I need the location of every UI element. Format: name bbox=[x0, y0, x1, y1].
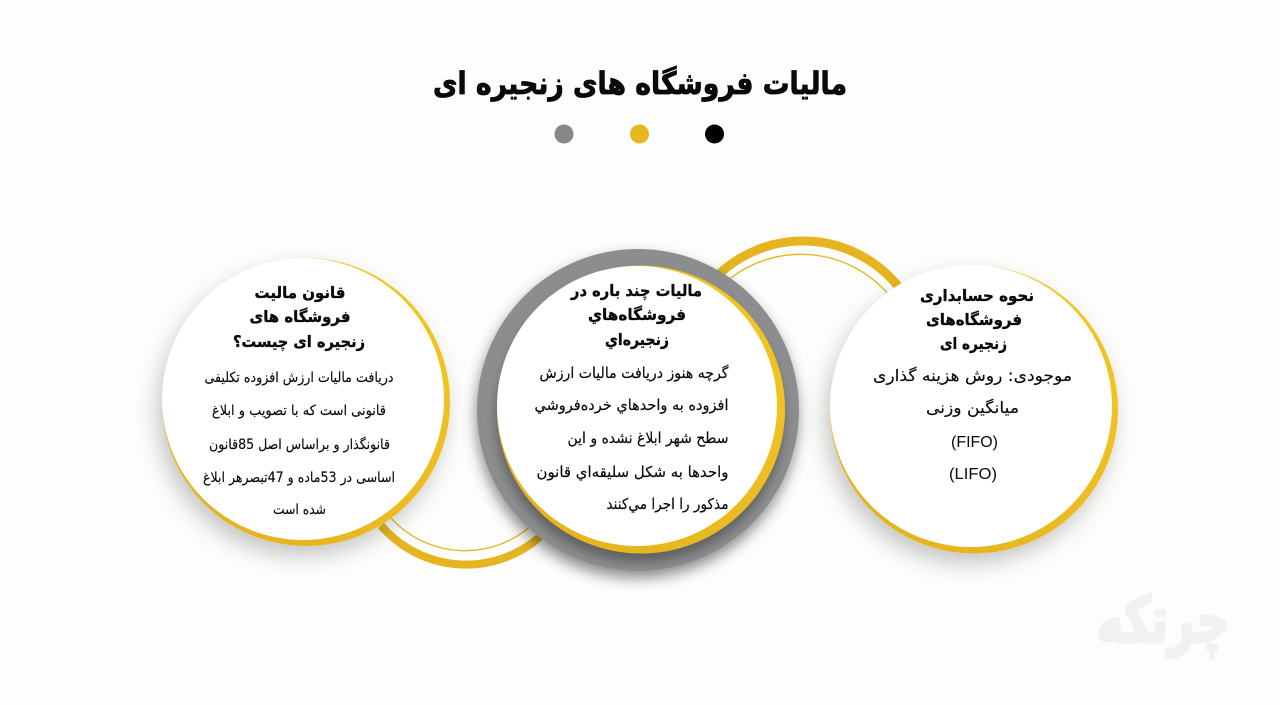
heading: left: زنجیره ای چیست؟ bbox=[233, 332, 365, 352]
text block: center bbox=[534, 364, 729, 514]
heading: right: فروشگاه‌های bbox=[926, 310, 1022, 329]
connector arc: bottom bbox=[381, 518, 545, 565]
heading: right bbox=[920, 286, 1034, 353]
text block: left: شده است bbox=[273, 502, 326, 518]
title: مالیات فروشگاه های زنجیره ای bbox=[433, 65, 847, 102]
panel: multiple tax bbox=[477, 249, 799, 571]
heading: right: نحوه حسابداری bbox=[920, 286, 1034, 305]
circle: right bbox=[830, 265, 1118, 554]
panel: chain store tax law bbox=[162, 258, 450, 546]
heading: center bbox=[570, 281, 702, 350]
text block: center: مذکور را اجرا مي‌کنند bbox=[606, 495, 728, 514]
heading: left: فروشگاه های bbox=[250, 307, 350, 326]
text block: right bbox=[873, 366, 1072, 483]
connector arc: top bbox=[716, 241, 898, 293]
text block: right: (LIFO) bbox=[949, 466, 997, 483]
heading: left: قانون مالیت bbox=[254, 283, 346, 302]
circle: left bbox=[162, 258, 450, 546]
watermark logo: چرتکه bbox=[1096, 584, 1230, 658]
text block: left: قانونگذار و براساس اصل 85قانون bbox=[209, 436, 390, 453]
heading: center: مالیات چند باره در bbox=[570, 281, 702, 301]
text block: left: دریافت مالیات ارزش افزوده تکلیفی bbox=[204, 370, 394, 386]
text block: center: سطح شهر ابلاغ نشده و این bbox=[568, 429, 728, 447]
text block: left bbox=[203, 370, 395, 518]
text block: left: اساسی در 53ماده و 47تبصرهر ابلاغ bbox=[203, 470, 395, 486]
heading: center: زنجیره‌اي bbox=[605, 330, 669, 350]
text block: right: موجودی: روش هزینه گذاری bbox=[873, 366, 1072, 386]
text block: center: واحدها به شکل سلیقه‌اي قانون bbox=[536, 463, 728, 482]
legend dots bbox=[554, 124, 724, 144]
text block: center: افزوده به واحدهاي خرده‌فروشي bbox=[534, 396, 728, 415]
text block: right: (FIFO) bbox=[951, 434, 998, 451]
panel: inventory accounting bbox=[830, 265, 1118, 554]
text block: left: قانونی است که با تصویب و ابلاغ bbox=[212, 403, 386, 419]
heading: right: زنجیره ای bbox=[940, 334, 1007, 353]
text block: right: میانگین وزنی bbox=[926, 398, 1019, 418]
heading: center: فروشگاه‌هاي bbox=[588, 305, 686, 325]
heading: left bbox=[233, 283, 365, 352]
circle: center bbox=[477, 249, 799, 571]
text block: center: گرچه هنوز دریافت مالیات ارزش bbox=[540, 364, 729, 382]
